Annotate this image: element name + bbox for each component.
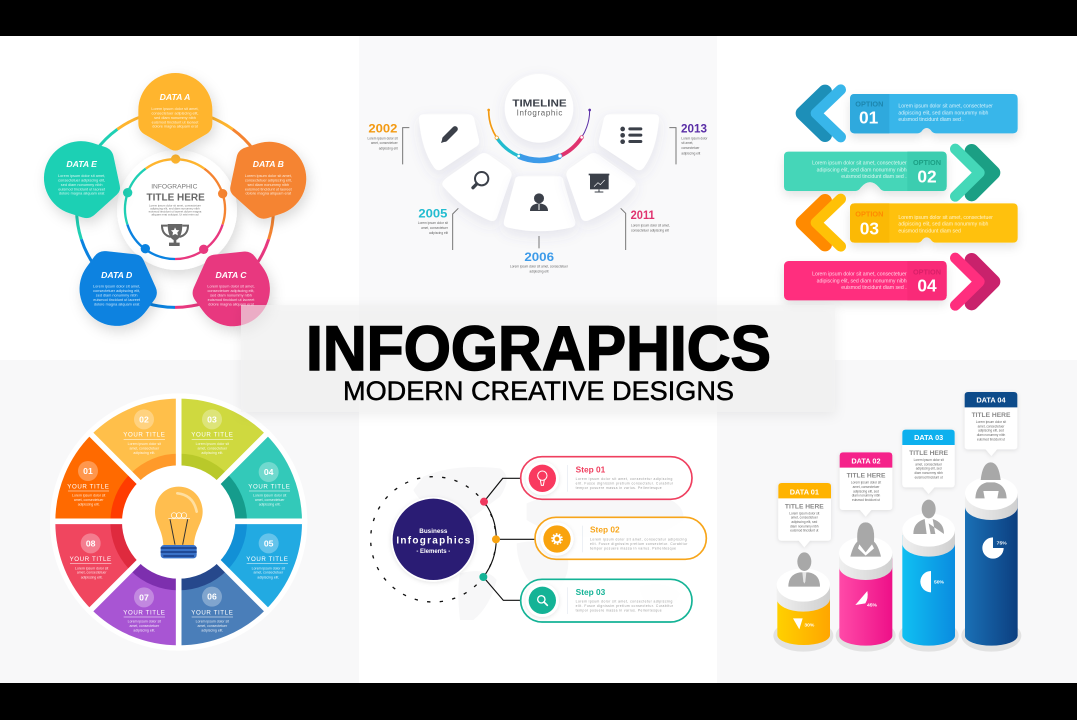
option 03: 03: [860, 218, 879, 238]
segment 05: amet, consectetuer: [254, 571, 284, 575]
segment 03: Lorem ipsum dolor sit: [196, 442, 229, 446]
option 02: euismod tincidunt diam sed .: [841, 174, 907, 180]
blob: data D: consectetuer adipiscing elit,: [93, 289, 140, 293]
icon: trophy: [162, 224, 188, 246]
segment 01: adipiscing elit.: [78, 503, 100, 507]
step 01: tempor posuere massa in varius. Pellentesque: [576, 486, 662, 490]
callout: data 02: euismod tincidunt ut: [852, 498, 880, 502]
blob: data E: sed diam nonummy nibh: [61, 183, 103, 187]
central circle: Business: [419, 528, 448, 535]
segment 03: amet, consectetuer: [198, 446, 228, 450]
segment 04: [248, 462, 290, 507]
central circle: [391, 497, 476, 582]
callout: data 01: DATA 01: [790, 487, 819, 496]
connector dots: [479, 498, 500, 581]
segment 07: Lorem ipsum dolor sit: [128, 620, 161, 624]
step 01: [521, 457, 692, 499]
segment 05: Lorem ipsum dolor sit: [252, 566, 285, 570]
panel: options: [784, 90, 1018, 305]
panel: cylinder bar chart: [773, 392, 1021, 652]
blob: data E: dolore magna aliquam erat: [59, 192, 105, 196]
blob: data C: Lorem ipsum dolor sit amet,: [207, 285, 255, 289]
cylinder 03: [899, 500, 959, 652]
segment 07: adipiscing elit.: [133, 629, 155, 633]
option 01: 01: [859, 108, 879, 128]
segment 06: adipiscing elit.: [201, 629, 223, 633]
card: magnifier: [442, 153, 512, 221]
blob: data A: [138, 73, 212, 151]
option 04: adipiscing elit, sed diam nonummy nibh: [817, 278, 907, 284]
segment 02: 02: [139, 414, 149, 424]
label: 2013: adipiscing elit: [681, 151, 700, 155]
option 04: OPTION: [913, 267, 941, 276]
segment 06: [191, 587, 233, 633]
segment 05: YOUR TITLE: [246, 556, 288, 563]
blob: data B: DATA B: [253, 159, 284, 169]
blob: data A: sed diam nonummy nibh: [154, 116, 196, 120]
callout: data 04: diam nonummy nibh: [977, 433, 1005, 437]
option 02: 02: [917, 167, 937, 187]
blob: data E: consectetuer adipiscing elit,: [58, 178, 105, 182]
segment 04: amet, consectetuer: [255, 498, 285, 502]
option 04: [784, 258, 993, 305]
blob: data C: consectetuer adipiscing elit,: [207, 289, 255, 293]
callout: data 03: adipiscing elit, sed: [916, 467, 942, 471]
callout: data 04: adipiscing elit, sed: [978, 429, 1004, 433]
option 01: Lorem ipsum dolor sit amet, consectetuer: [898, 104, 993, 110]
option 01: OPTION: [855, 99, 883, 108]
callout: data 03: DATA 03: [914, 433, 943, 442]
blob: data B: consectetuer adipiscing elit,: [245, 178, 292, 182]
label: 2005: Lorem ipsum dolor sit: [418, 221, 448, 225]
cylinder 04: [961, 462, 1021, 652]
center title: aliquam erat volutpat. Ut wisi enim ad: [151, 213, 199, 217]
segment 02: [123, 409, 165, 455]
cylinder 01: 30%: [804, 623, 815, 629]
segment 07: 07: [139, 592, 149, 602]
callout: data 01: diam nonummy nibh: [790, 524, 819, 528]
connectors: [483, 478, 535, 600]
segment 04: YOUR TITLE: [248, 483, 290, 490]
label: 2013: consectetuer: [681, 146, 699, 150]
blob: data C: dolore magna aliquam erat: [208, 302, 255, 306]
segment 08: YOUR TITLE: [70, 556, 112, 563]
segment 01: 01: [83, 466, 93, 476]
callout: data 03: TITLE HERE: [909, 450, 949, 457]
card: person: [504, 176, 575, 231]
option 01: [803, 90, 1018, 137]
cylinder 03: 50%: [934, 579, 945, 585]
step 03: [521, 579, 692, 622]
step 03: Lorem ipsum dolor sit amet, consectetur adipiscing: [576, 599, 672, 603]
blob: data B: Lorem ipsum dolor sit amet,: [245, 174, 292, 178]
label: 2002: Lorem ipsum dolor sit: [367, 136, 398, 140]
label: 2011: 2011: [631, 208, 655, 222]
center title: INFOGRAPHIC: [151, 183, 198, 190]
segment 08: Lorem ipsum dolor sit: [75, 566, 108, 570]
segment 06: YOUR TITLE: [191, 609, 233, 616]
icon: light bulb: [155, 487, 203, 558]
step 02: elit. Fusce dignissim pretium consectetur. Curabitur: [590, 542, 688, 546]
callout: data 04: TITLE HERE: [972, 412, 1011, 419]
segment 03: [191, 409, 233, 455]
option 02: OPTION: [913, 158, 941, 167]
callout: data 02: DATA 02: [851, 456, 881, 465]
blob: data B: sed diam nonummy nibh: [247, 183, 289, 187]
blob: data A: consectetuer adipiscing elit,: [151, 111, 199, 115]
blob: data C: DATA C: [215, 270, 247, 280]
label: 2006: adipiscing elit: [530, 269, 549, 273]
label: 2002: adipiscing elit: [379, 146, 398, 150]
callout: data 01: TITLE HERE: [785, 503, 824, 510]
label: 2011: consectetuer adipiscing elit: [631, 228, 669, 232]
segment 03: 03: [207, 414, 217, 424]
step 01: Step 01: [576, 464, 606, 474]
blob: data A: Lorem ipsum dolor sit amet,: [151, 107, 199, 111]
label: 2002: [367, 121, 409, 164]
label: 2002: 2002: [368, 121, 398, 135]
option 03: Lorem ipsum dolor sit amet, consectetuer: [898, 215, 993, 221]
segment 03: YOUR TITLE: [191, 432, 233, 439]
segment 01: YOUR TITLE: [67, 484, 109, 491]
blob: data D: [65, 234, 170, 341]
card: list: [599, 114, 659, 170]
callout: data 01: Lorem ipsum dolor sit: [789, 511, 820, 515]
blob: data C: euismod tincidunt ut laoreet: [208, 298, 255, 302]
step 02: [535, 517, 706, 559]
center title: Lorem ipsum dolor sit amet, consectetuer: [149, 204, 201, 208]
cylinder 01: [773, 552, 833, 652]
dashed orbit: [371, 477, 496, 602]
segment 02: YOUR TITLE: [123, 432, 165, 439]
blob: data E: DATA E: [66, 159, 97, 169]
segment 04: adipiscing elit.: [259, 503, 281, 507]
segment 01: [67, 461, 109, 507]
callout: data 03: amet, consectetuer: [915, 462, 942, 466]
title banner: [241, 305, 835, 412]
callout: data 04: Lorem ipsum dolor sit: [976, 420, 1006, 424]
blob: data B: euismod tincidunt ut laoreet: [245, 187, 293, 191]
label: 2005: 2005: [418, 206, 448, 220]
callout: data 03: euismod tincidunt ut: [915, 475, 943, 479]
callout: data 02: [840, 452, 892, 517]
outer ring: [77, 111, 273, 307]
callout: data 04: euismod tincidunt ut: [977, 437, 1005, 441]
panel: business steps: [371, 457, 706, 622]
step 03: elit. Fusce dignissim pretium consectetur. Curabitur: [576, 604, 674, 608]
blob: data E: [34, 131, 131, 226]
main title: INFOGRAPHICS: [306, 314, 771, 384]
segment 05: [246, 533, 288, 579]
segment 05: 05: [264, 538, 274, 548]
callout: data 01: amet, consectetuer: [791, 516, 818, 520]
step 02: Lorem ipsum dolor sit amet, consectetur adipiscing: [590, 537, 687, 541]
cylinder 02: 45%: [867, 603, 878, 609]
label: 2005: adipiscing elit: [429, 231, 448, 235]
step 02: tempor posuere massa in varius. Pellentesque: [590, 546, 676, 550]
segment 04: 04: [264, 467, 274, 477]
timeline heading circle: [505, 74, 573, 143]
blob: data B: dolore magna aliquam erat: [246, 192, 292, 196]
segment 01: Lorem ipsum dolor sit: [72, 494, 105, 498]
label: 2013: 2013: [681, 121, 707, 135]
callout: data 02: Lorem ipsum dolor sit: [851, 481, 881, 485]
option 03: adipiscing elit, sed diam nonummy nibh: [898, 222, 988, 228]
subtitle: MODERN CREATIVE DESIGNS: [343, 376, 734, 406]
step 02: Step 02: [590, 524, 620, 534]
segment 03: adipiscing elit.: [201, 451, 223, 455]
step 01: Lorem ipsum dolor sit amet, consectetur adipiscing: [576, 477, 672, 481]
segment 08: [70, 533, 112, 579]
blob: data D: Lorem ipsum dolor sit amet,: [93, 285, 140, 289]
center disc: [117, 150, 237, 270]
segment 07: amet, consectetuer: [130, 624, 160, 628]
segment 02: Lorem ipsum dolor sit: [128, 442, 161, 446]
card: presentation board: [566, 153, 636, 221]
label: 2006: 2006: [524, 250, 554, 264]
center title: [147, 183, 205, 217]
segment 07: YOUR TITLE: [123, 609, 165, 616]
callout: data 03: diam nonummy nibh: [914, 471, 943, 475]
option 02: adipiscing elit, sed diam nonummy nibh: [817, 167, 907, 173]
blob: data D: DATA D: [101, 270, 132, 280]
option 03: euismod tincidunt diam sed: [898, 228, 961, 234]
segments: [50, 393, 307, 651]
blob: data E: euismod tincidunt ut laoreet: [58, 187, 106, 191]
callout: data 03: [902, 430, 955, 494]
option 02: [784, 149, 993, 196]
option 04: 04: [917, 276, 937, 296]
segment 02: amet, consectetuer: [130, 446, 160, 450]
option 01: euismod tincidunt diam sed .: [898, 117, 964, 123]
option 03: OPTION: [855, 210, 883, 219]
timeline heading circle: TIMELINE: [512, 99, 567, 110]
blob: data A: dolore magna aliquam erat: [152, 125, 199, 129]
callout: data 04: DATA 04: [976, 396, 1007, 405]
label: 2013: Lorem ipsum dolor: [681, 136, 707, 140]
segment 07: [123, 587, 165, 633]
timeline arc: [487, 109, 591, 160]
callout: data 02: adipiscing elit, sed: [853, 489, 879, 493]
segment 06: 06: [207, 592, 217, 602]
segment 06: Lorem ipsum dolor sit: [196, 620, 229, 624]
callout: data 02: amet, consectetuer: [853, 485, 879, 489]
blob: data C: [179, 235, 285, 341]
label: 2013: sit amet,: [681, 141, 693, 145]
inner ring: [123, 154, 227, 259]
option 04: Lorem ipsum dolor sit amet, consectetuer: [812, 272, 907, 278]
cylinder 02: [836, 522, 896, 652]
label: 2006: Lorem ipsum dolor sit amet, consectetuer: [510, 264, 568, 268]
timeline heading circle: Infographic: [517, 108, 562, 117]
center title: adipiscing elit, sed diam nonummy nibh: [150, 207, 200, 211]
label: 2005: amet, consectetuer: [421, 226, 448, 230]
step 01: elit. Fusce dignissim pretium consectetur. Curabitur: [576, 482, 674, 486]
segment 06: amet, consectetuer: [198, 624, 228, 628]
step 03: Step 03: [576, 587, 606, 597]
center title: TITLE HERE: [147, 192, 205, 203]
segment 08: amet, consectetuer: [77, 571, 107, 575]
label: 2005: [418, 206, 458, 250]
blob: data D: sed diam nonummy nibh: [96, 294, 138, 298]
option 04: euismod tincidunt diam sed .: [841, 285, 907, 291]
card: pencil: [419, 114, 479, 170]
label: 2011: Lorem ipsum dolor sit amet,: [631, 224, 670, 228]
step 03: tempor posuere massa in varius. Pellentesque: [576, 608, 662, 612]
option 01: adipiscing elit, sed diam nonummy nibh: [898, 111, 988, 117]
callout: data 04: [965, 392, 1017, 456]
segment 08: 08: [86, 538, 96, 548]
label: 2002: amet, consectetuer: [371, 141, 398, 145]
blob: data E: Lorem ipsum dolor sit amet,: [58, 174, 105, 178]
central circle: - Elements -: [416, 549, 450, 555]
panel: eight segment wheel: [50, 393, 307, 651]
callout: data 04: amet, consectetuer: [978, 424, 1004, 428]
wheel backing: [50, 393, 307, 651]
blob: data C: sed diam nonummy nibh: [210, 294, 252, 298]
segment 04: Lorem ipsum dolor sit: [253, 494, 286, 498]
blob: data B: [219, 132, 316, 226]
callout: data 02: diam nonummy nibh: [852, 494, 880, 498]
panel: five data cycle: [34, 73, 316, 341]
center title: euismod tincidunt ut laoreet dolore magna: [149, 210, 202, 214]
callout: data 01: adipiscing elit, sed: [791, 520, 817, 524]
callout: data 02: TITLE HERE: [847, 473, 886, 480]
blob: data D: euismod tincidunt ut laoreet: [93, 298, 141, 302]
blob: data D: dolore magna aliquam erat: [94, 302, 140, 306]
label: 2011: [621, 208, 670, 250]
option 02: Lorem ipsum dolor sit amet, consectetuer: [812, 161, 907, 167]
segment 05: adipiscing elit.: [257, 575, 279, 579]
option 03: [803, 199, 1018, 246]
panel: timeline: [367, 74, 707, 273]
callout: data 03: Lorem ipsum dolor sit: [914, 458, 944, 462]
cylinder 04: 75%: [997, 540, 1007, 546]
callout: data 01: [778, 483, 831, 547]
blob: data A: DATA A: [160, 92, 190, 102]
label: 2006: [510, 236, 568, 273]
world map: [413, 467, 684, 620]
callout: data 01: euismod tincidunt ut: [790, 529, 818, 533]
segment 08: adipiscing elit.: [81, 575, 103, 579]
central circle: Infographics: [396, 536, 471, 547]
segment 02: adipiscing elit.: [133, 451, 155, 455]
blob: data A: euismod tincidunt ut laoreet: [152, 120, 199, 124]
label: 2013: [669, 121, 707, 164]
segment 01: amet, consectetuer: [74, 498, 104, 502]
